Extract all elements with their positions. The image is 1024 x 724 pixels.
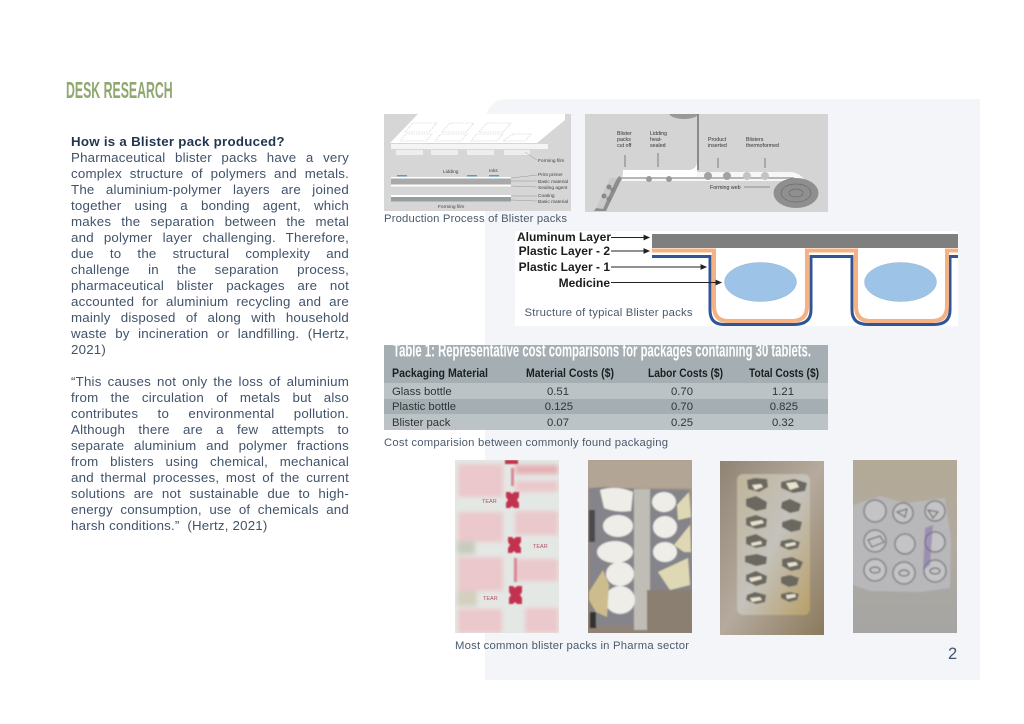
- text block: how blister packs are produced: How is a Blister pack produced?: [71, 134, 285, 149]
- panel: pale background: [485, 99, 980, 680]
- text block: how blister packs are produced: challenge in the separation process,: [71, 262, 349, 277]
- diagram: forming film layers: Basic material: [538, 199, 568, 205]
- title: DESK RESEARCH: [66, 77, 173, 103]
- photo: printed tear-line blister: TEAR: [482, 499, 497, 505]
- text block: how blister packs are produced: accounted for aluminium recycling and are: [71, 294, 349, 309]
- table: cost comparison: Blister pack: [392, 417, 451, 429]
- table: cost comparison: 0.70: [671, 386, 693, 398]
- diagram: blister pack structure: Structure of typical Blister packs: [524, 307, 693, 319]
- text block: how blister packs are produced: Pharmaceutical blister packs have a very: [71, 150, 349, 165]
- diagram: blister pack structure: Plastic Layer - 2: [519, 244, 610, 258]
- diagram: blister pack structure: Aluminum Layer: [517, 230, 611, 244]
- diagram: blister pack structure: Medicine: [559, 276, 610, 290]
- table: cost comparison: Labor Costs ($): [648, 368, 723, 380]
- table: cost comparison: 1.21: [772, 386, 794, 398]
- diagram: blister production line: Blister: [617, 131, 632, 137]
- diagram: blister production line: Forming web: [710, 185, 741, 191]
- text block: how blister packs are produced: energy consumption, use of chemicals and: [71, 502, 349, 517]
- diagram: forming film layers: Sealing agent: [538, 185, 568, 191]
- diagram: forming film layers: Coating: [538, 193, 555, 199]
- table: cost comparison: Glass bottle: [392, 386, 452, 398]
- text block: how blister packs are produced: “This causes not only the loss of aluminium: [71, 374, 349, 389]
- diagram: forming film layers: Forming film: [438, 204, 464, 210]
- diagram: blister pack structure: [515, 230, 958, 326]
- text block: how blister packs are produced: together using a bonding agent, which: [71, 198, 349, 213]
- diagram: blister production line: [585, 107, 828, 212]
- table: cost comparison: [384, 340, 828, 430]
- table: cost comparison: Material Costs ($): [526, 368, 614, 380]
- text block: how blister packs are produced: [71, 134, 349, 533]
- photo: printed tear-line blister: TEAR: [483, 596, 498, 602]
- diagram: blister production line: Blisters: [746, 137, 764, 143]
- text block: how blister packs are produced: pharmaceutical blister packages are not: [71, 278, 349, 293]
- photo: printed tear-line blister: TEAR: [533, 544, 548, 550]
- diagram: forming film layers: Basic material: [538, 179, 568, 185]
- text block: how blister packs are produced: solutions are not sustainable due to high-: [71, 486, 349, 501]
- diagram: blister production line: cut off: [617, 143, 632, 149]
- photo: crushed silver blister sheet: [853, 460, 957, 633]
- text block: how blister packs are produced: 2021): [71, 342, 106, 357]
- text block: how blister packs are produced: separate aluminium and polymer fractions: [71, 438, 349, 453]
- photo: printed tear-line blister: [455, 460, 559, 633]
- text block: how blister packs are produced: from the circulation of metals but also: [71, 390, 349, 405]
- photo: gold foil blister strip: [720, 461, 824, 635]
- diagram: forming film layers: [384, 114, 571, 211]
- text block: how blister packs are produced: mainly disposed of along with household: [71, 310, 349, 325]
- caption: production process: Production Process of Blister packs: [384, 213, 567, 225]
- diagram: blister production line: heat-: [650, 137, 662, 143]
- table: cost comparison: Plastic bottle: [392, 401, 456, 413]
- diagram: forming film layers: Lidding: [443, 169, 459, 175]
- diagram: blister production line: Product: [708, 137, 727, 143]
- table: cost comparison: Packaging Material: [392, 368, 488, 380]
- diagram: blister production line: inserted: [708, 143, 727, 149]
- text block: how blister packs are produced: makes the separation between the metal: [71, 214, 349, 229]
- table: cost comparison: 0.25: [671, 417, 693, 429]
- text block: how blister packs are produced: contributes to environmental pollution.: [71, 406, 349, 421]
- diagram: forming film layers: Print primer: [538, 172, 563, 178]
- table: cost comparison: 0.125: [545, 401, 573, 413]
- table: cost comparison: 0.32: [772, 417, 794, 429]
- diagram: blister production line: Lidding: [650, 131, 667, 137]
- table: cost comparison: 0.70: [671, 401, 693, 413]
- text block: how blister packs are produced: waste by incineration or landfilling. (Hertz,: [71, 326, 349, 341]
- text block: how blister packs are produced: The aluminium-polymer layers are joined: [71, 182, 349, 197]
- table: cost comparison: Total Costs ($): [749, 368, 819, 380]
- table: cost comparison: 0.51: [547, 386, 569, 398]
- text block: how blister packs are produced: and thermal processes, most of the current: [71, 470, 349, 485]
- diagram: forming film layers: Inks: [489, 168, 498, 174]
- table: cost comparison: 0.825: [770, 401, 798, 413]
- artwork: diagrams, table and photos: [384, 114, 958, 659]
- table: cost comparison: 0.07: [547, 417, 569, 429]
- text block: how blister packs are produced: harsh conditions.” (Hertz, 2021): [71, 518, 268, 533]
- text block: how blister packs are produced: and polymer layer challenging. Therefore,: [71, 230, 349, 245]
- diagram: blister production line: sealed: [650, 143, 666, 149]
- text block: how blister packs are produced: complex structure of polymers and metals.: [71, 166, 349, 181]
- diagram: blister production line: packs: [617, 137, 631, 143]
- diagram: forming film layers: Forming film: [538, 158, 564, 164]
- photo: opened foil blister with white tablets: [588, 460, 692, 633]
- diagram: blister production line: thermoformed: [746, 143, 779, 149]
- diagram: blister pack structure: Plastic Layer - 1: [519, 260, 610, 274]
- text block: how blister packs are produced: due to the structural complexity and: [71, 246, 349, 261]
- text block: how blister packs are produced: from blisters using chemical, mechanical: [71, 454, 349, 469]
- caption: cost comparison: Cost comparision between commonly found packaging: [384, 437, 668, 449]
- text block: how blister packs are produced: Although there are a few attempts to: [71, 422, 349, 437]
- page number: 2: [948, 645, 957, 663]
- caption: common blister packs: Most common blister packs in Pharma sector: [455, 640, 689, 652]
